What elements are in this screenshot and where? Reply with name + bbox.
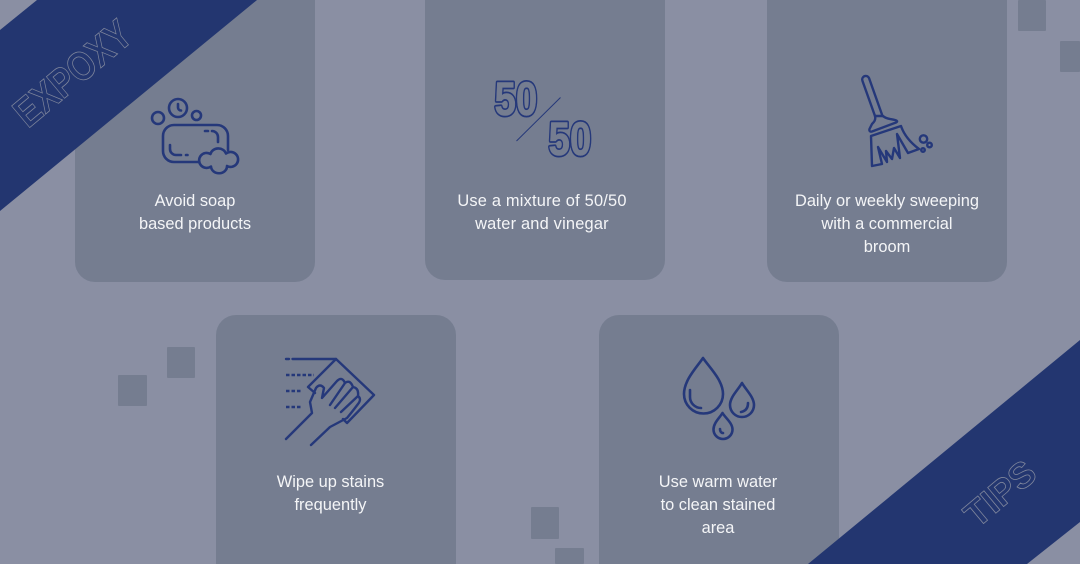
- icon: broom: [862, 76, 932, 166]
- text: soap tip: based products: [139, 215, 251, 233]
- text: soap tip: Avoid soap: [155, 192, 235, 210]
- decorative square top right: [1018, 0, 1046, 31]
- text: soap tip: [139, 192, 251, 233]
- icon: 50/50 ratio: 50: [548, 113, 591, 166]
- panel: sweeping tip: [767, 0, 1007, 282]
- icon: hand wiping cloth: [286, 359, 374, 445]
- decorative square bottom center lower: [555, 548, 584, 564]
- decorative square far right: [1060, 41, 1080, 72]
- icon: 50/50 ratio: [494, 73, 591, 166]
- decorative square bottom center upper: [531, 507, 559, 539]
- banner: bottom right: [808, 340, 1080, 564]
- text: sweeping tip: with a commercial: [821, 215, 953, 233]
- icon: 50/50 ratio: 50: [494, 73, 537, 126]
- text: warm water tip: Use warm water: [659, 473, 777, 491]
- text: vinegar tip: water and vinegar: [475, 215, 609, 233]
- icon: 50/50 ratio: 50: [548, 113, 591, 166]
- text: stains tip: [276, 473, 384, 514]
- text: vinegar tip: [457, 192, 627, 233]
- icon: 50/50 ratio: 50: [494, 73, 537, 126]
- icon: soap bar: [152, 99, 238, 173]
- icon: water drops: [684, 358, 754, 439]
- text: vinegar tip: Use a mixture of 50/50: [457, 192, 627, 210]
- decorative square left upper: [167, 347, 195, 378]
- panel: vinegar tip: [425, 0, 665, 280]
- banner label: TIPS: TIPS: [956, 452, 1044, 535]
- text: sweeping tip: [795, 192, 979, 256]
- text: warm water tip: area: [702, 519, 734, 537]
- text: warm water tip: to clean stained: [661, 496, 775, 514]
- panel: warm water tip: [599, 315, 839, 564]
- text: sweeping tip: broom: [864, 238, 910, 256]
- panel: stains tip: [216, 315, 456, 564]
- text: stains tip: Wipe up stains: [277, 473, 384, 491]
- decorative square left lower: [118, 375, 147, 406]
- text: sweeping tip: Daily or weekly sweeping: [795, 192, 979, 210]
- text: stains tip: frequently: [294, 496, 366, 514]
- text: warm water tip: [659, 473, 777, 537]
- banner: top left: [0, 0, 257, 211]
- panel: soap tip: [75, 0, 315, 282]
